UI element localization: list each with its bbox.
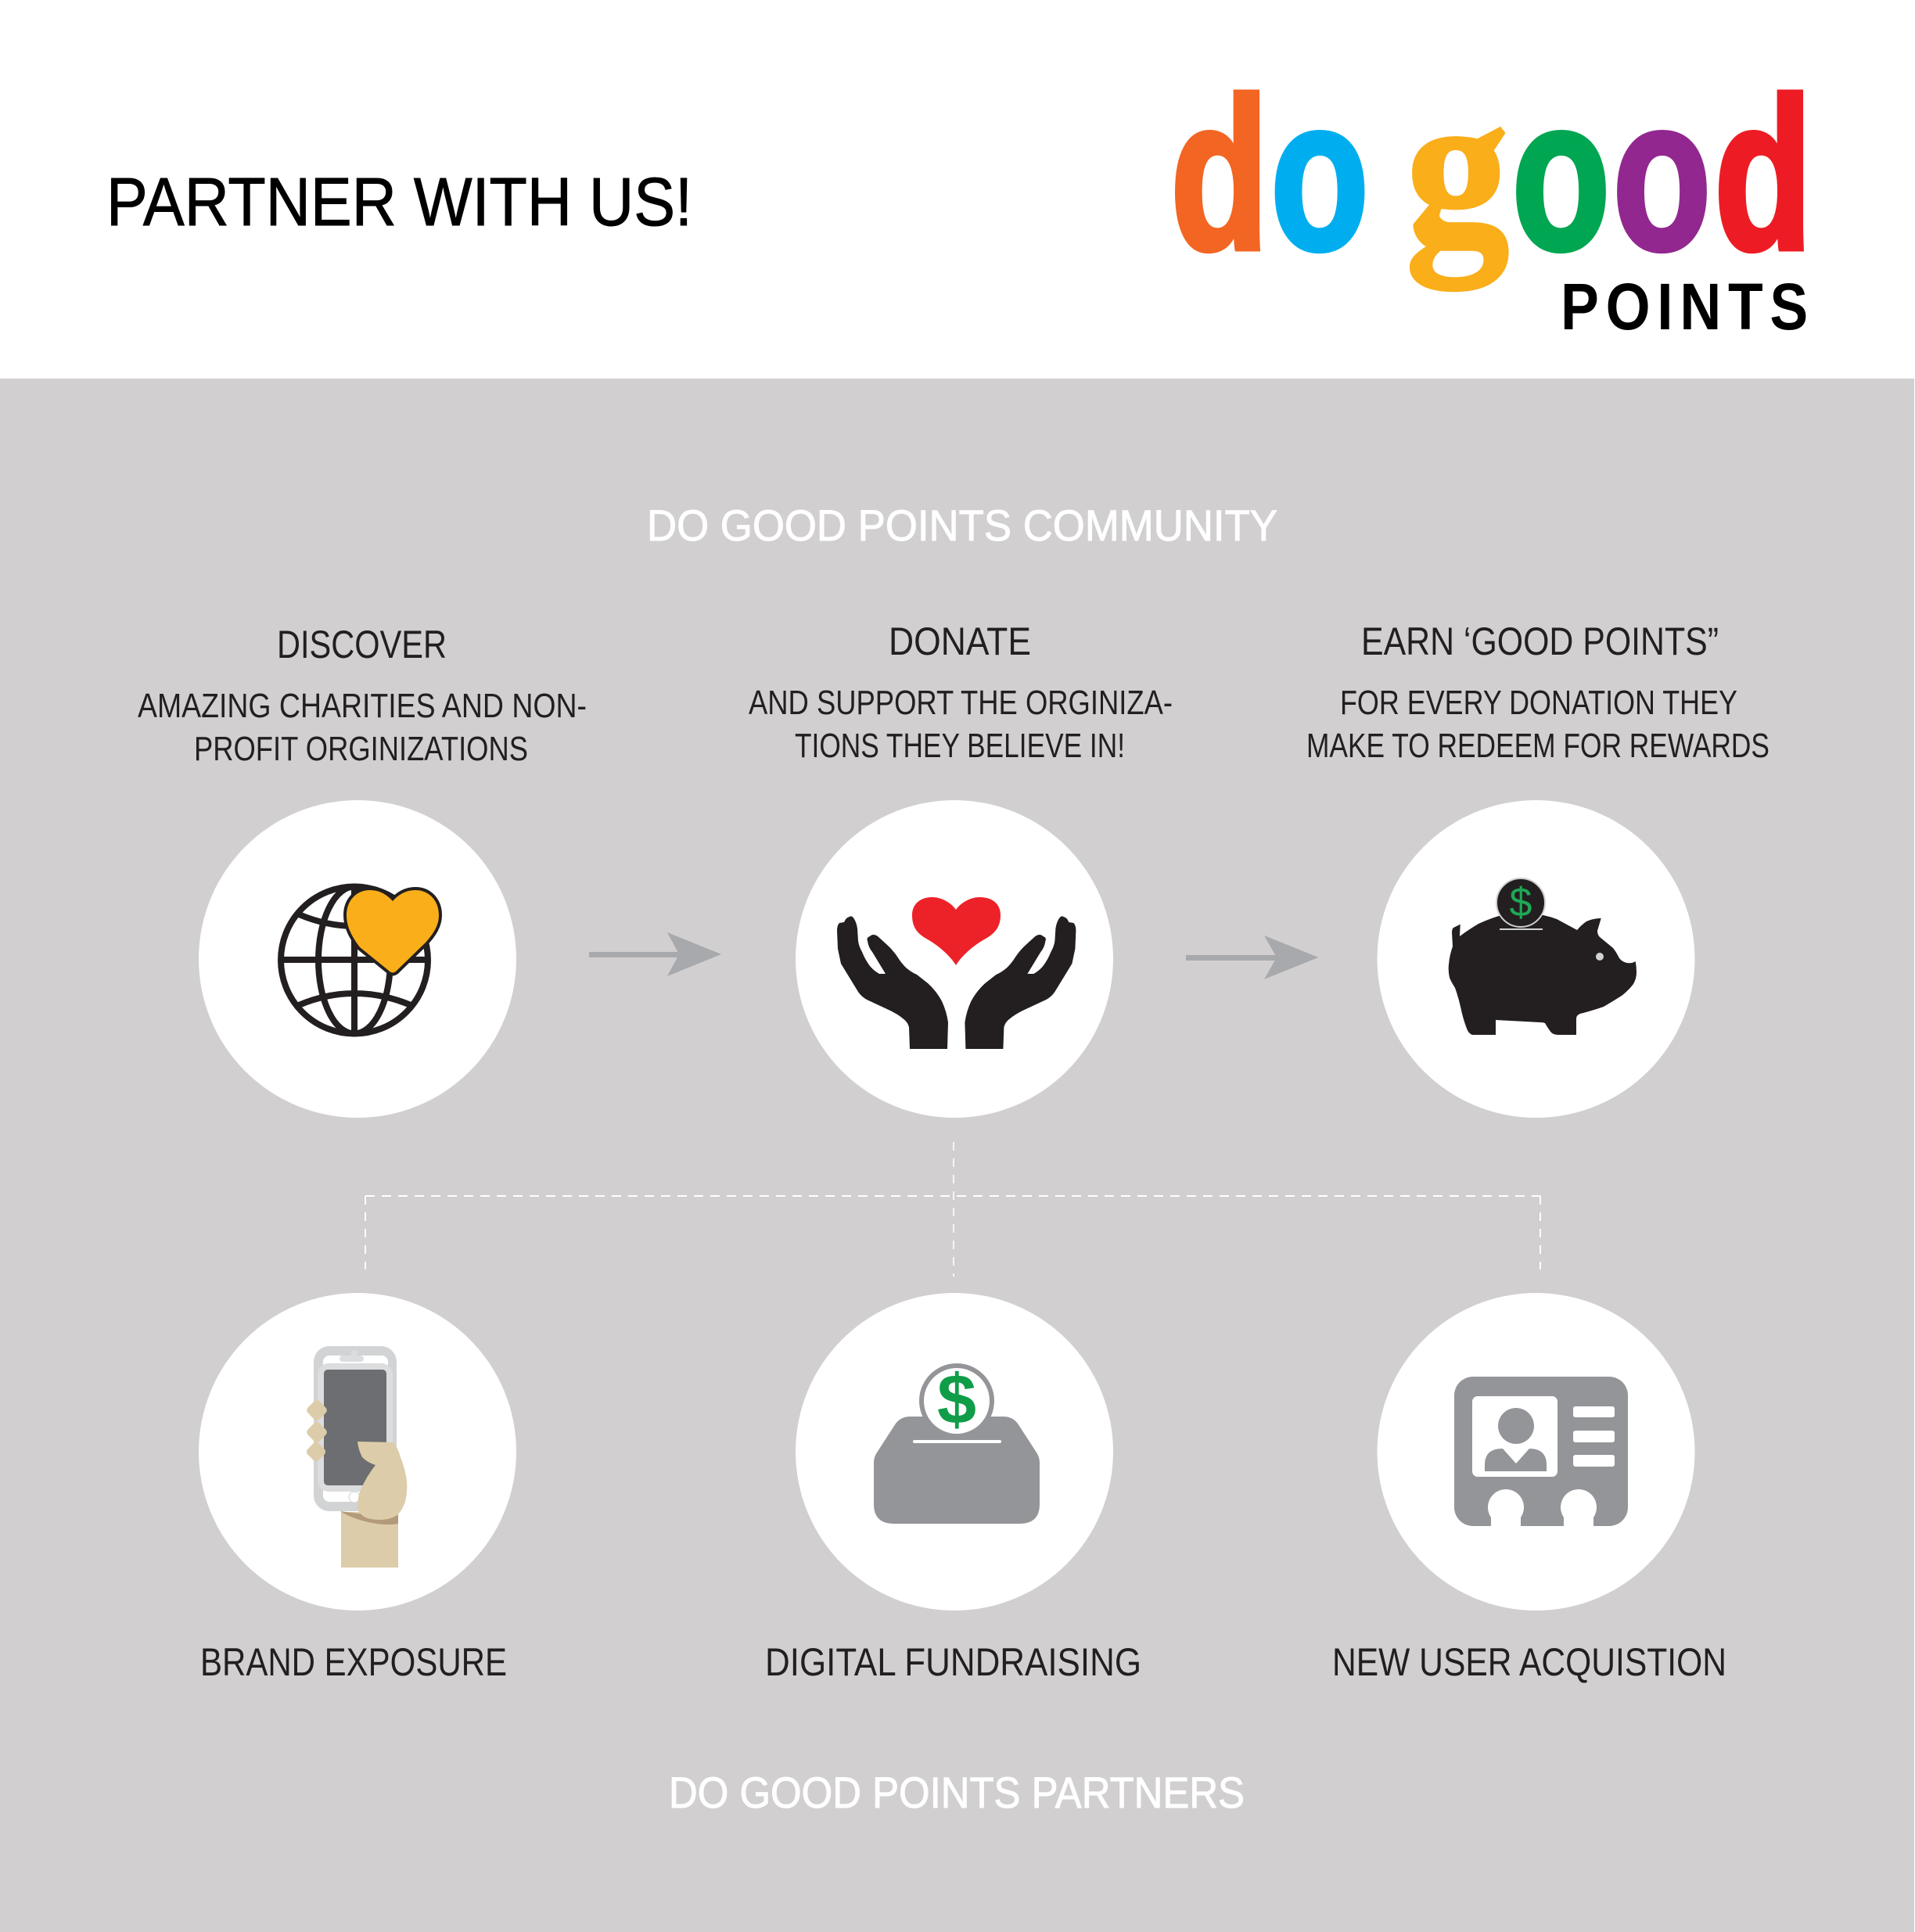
icon: globe with heart (281, 886, 439, 1034)
text block: discover (138, 623, 587, 768)
text block: donate: TIONS THEY BELIEVE IN! (795, 727, 1125, 765)
coin slot (1500, 928, 1543, 930)
icon: donation box with coin (874, 1361, 1040, 1524)
icon: id card (1454, 1377, 1628, 1526)
text block: donate: DONATE (889, 619, 1031, 663)
dashed connectors (365, 1142, 1540, 1277)
coin (1496, 878, 1545, 927)
coin (919, 1363, 994, 1438)
circle: new user acquisition (1377, 1293, 1694, 1611)
phone case (314, 1346, 397, 1511)
logo wordmark: d (1170, 54, 1269, 295)
circle: discover (199, 800, 516, 1118)
icon: piggy bank with coin (1449, 878, 1637, 1035)
info lines (1573, 1406, 1615, 1467)
title: PARTNER WITH US! (106, 164, 692, 240)
label: digital fundraising: DIGITAL FUNDRAISING (765, 1640, 1141, 1684)
label: new user acquisition: NEW USER ACQUISTION (1332, 1640, 1726, 1684)
dollar sign: $ (937, 1361, 976, 1439)
photo (1472, 1396, 1558, 1477)
arrow: donate to earn (1186, 935, 1319, 979)
heading: partners: DO GOOD POINTS PARTNERS (669, 1768, 1245, 1817)
logo wordmark: o (1512, 54, 1610, 295)
circle: brand exposure (199, 1293, 516, 1611)
circle: digital fundraising (796, 1293, 1113, 1611)
arrow: discover to donate (589, 932, 721, 976)
circle: donate (796, 800, 1113, 1118)
text block: discover: DISCOVER (277, 623, 447, 666)
text block: discover: AMAZING CHARITIES AND NON- (138, 688, 587, 725)
circle: earn (1377, 800, 1694, 1118)
text block: earn good points (1306, 619, 1769, 765)
text block: donate: AND SUPPORT THE ORGINIZA- (749, 684, 1173, 722)
thumb and palm (357, 1442, 407, 1520)
eye (1596, 953, 1604, 961)
arm (341, 1512, 398, 1568)
logo: do good points (1170, 46, 1815, 343)
wrist band (340, 1511, 398, 1524)
logo subtitle: POINTS (1561, 270, 1815, 343)
logo wordmark: g (1406, 46, 1509, 293)
text block: earn good points: FOR EVERY DONATION THEY (1340, 684, 1737, 722)
text block: discover: PROFIT ORGINIZATIONS (194, 731, 528, 768)
text block: earn good points: MAKE TO REDEEM FOR REWARDS (1306, 727, 1769, 765)
heading: community: DO GOOD POINTS COMMUNITY (647, 501, 1277, 550)
text block: donate (749, 619, 1173, 765)
logo wordmark: o (1270, 54, 1369, 295)
icon: hands holding heart (837, 897, 1076, 1049)
dollar sign: $ (1510, 880, 1532, 925)
fingers (305, 1399, 329, 1463)
icon: hand holding phone (305, 1346, 407, 1568)
slot (913, 1440, 1001, 1443)
text block: earn good points: EARN ‘GOOD POINTS” (1361, 619, 1719, 663)
key holes (1488, 1489, 1597, 1526)
logo wordmark (1170, 46, 1813, 295)
logo wordmark: d (1714, 54, 1813, 295)
label: brand exposure: BRAND EXPOSURE (200, 1640, 507, 1684)
logo wordmark: o (1613, 54, 1711, 295)
